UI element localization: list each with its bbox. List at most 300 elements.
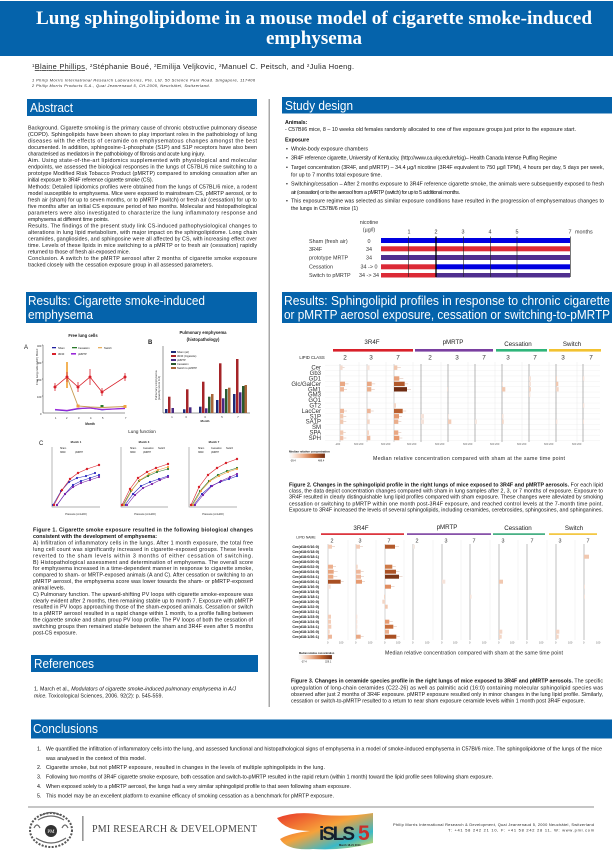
- chart: exposure timeline: 3R4F: [309, 247, 323, 253]
- chart: figure 2 lipid class profile: GT2: [309, 404, 322, 410]
- text block: conclusions: When exposed solely to a pMRTP aerosol, the lungs had a very similar sphingolipid profile to that seen following sham exposure.: [46, 784, 351, 790]
- heading: results left: emphysema: [28, 308, 93, 322]
- chart: figure 2 lipid class profile: 7: [533, 354, 537, 362]
- chart: figure 3 ceramide species profile: Cer(d18:1/22:1): [292, 610, 320, 614]
- chart: figure 2 lipid class profile: 600 200: [572, 442, 582, 446]
- legend: figure 2 colour scale: 489.4: [318, 460, 325, 462]
- chart: exposure timeline: [309, 220, 593, 279]
- chart: figure 3 ceramide species profile: Cer(d18:1/18:0): [292, 590, 320, 594]
- logo: iSLS 5 conference: iSLS: [319, 824, 355, 845]
- chart A: free lung cells: 0: [40, 412, 42, 416]
- text block: abstract: diseases with the effects of ceramide on emphysematous changes amongst the best: [28, 139, 258, 145]
- text block: study design: •: [286, 198, 288, 204]
- affiliations: [31, 78, 256, 88]
- legend: figure 3 colour scale: [299, 652, 335, 664]
- text block: study design: Whole-body exposure chambers: [291, 147, 368, 153]
- chart: exposure timeline: months: [575, 230, 593, 236]
- text block: figure 3 caption: cessation or switch-to-pMRTP resulted to a return to near sham exposure ceramide levels within 1 month post 3R4F exposure.: [291, 699, 585, 705]
- text block: study design: •: [286, 181, 288, 187]
- chart: figure 3 ceramide species profile: 100: [339, 640, 344, 644]
- text block: study design: •: [286, 156, 288, 162]
- text block: abstract: endpoints, we assessed the biological responses in the lungs of C57BL/6 mice switching to a: [28, 165, 257, 171]
- text block: study design: •: [286, 147, 288, 153]
- text block: conclusions: [37, 746, 602, 800]
- text block: figure 1 caption: clearly evident after 2 months, then remaining stable up to month 7. Exposure with pMRTP: [33, 598, 253, 604]
- plot: month 7: Cessation: [211, 447, 222, 450]
- chart: figure 3 ceramide species profile: Cer(d18:0/18:1): [292, 555, 320, 559]
- chart A: free lung cells: Switch: [104, 346, 112, 350]
- chart: exposure timeline: Switch to pMRTP: [309, 273, 351, 279]
- text block: figure 2 caption: cessation or switching to pMRTP within one month post-3R4F exposure, and reached control levels at the 7-month time point.: [289, 501, 603, 507]
- text block: abstract: Background. Cigarette smoking is the primary cause of chronic obstructive pulmonary disease: [28, 126, 257, 132]
- chart: exposure timeline: 34 -> 34: [359, 273, 379, 279]
- chart A: free lung cells: 5: [102, 416, 104, 420]
- text block: figure 3 caption: upregulation of long-chain ceramides (C22-26) as well as palmitic acid (16:0) containing molecular sphingolipid species was: [291, 686, 603, 692]
- chart: figure 3 ceramide species profile: 100: [368, 640, 373, 644]
- chart: figure 3 ceramide species profile: 0: [327, 640, 329, 644]
- chart: figure 3 ceramide species profile: Cer(d18:1/23:0): [292, 615, 320, 619]
- text block: abstract: Methods: Detailed lipidomics profiles were obtained from the lungs of C57BL/6 mice, a rodent: [28, 184, 258, 190]
- text block: figure 1 caption: to a pMRTP aerosol resulted in a rapid change within 1 month, to a profile falling between: [33, 611, 253, 617]
- chart: figure 2 lipid class profile: 3: [561, 354, 565, 362]
- chart: exposure timeline: nicotine: [360, 220, 378, 226]
- chart C: lung function PV loops: C: [39, 441, 44, 447]
- chart B: pulmonary emphysema bars: pMRTP: [177, 358, 186, 362]
- chart: figure 3 ceramide species profile: Cer(d18:1/26:1): [292, 635, 320, 639]
- 3R4F month 7 bars: [382, 545, 399, 639]
- text block: study design: This exposure regime was selected as similar exposure conditions have resulted in the progression of emphysematous changes to: [291, 198, 604, 204]
- legend: figure 3 colour scale: 329.1: [325, 660, 332, 664]
- chart: exposure timeline: Cessation: [309, 265, 333, 271]
- legend: figure 3 colour scale: -37.4: [301, 660, 307, 664]
- chart: figure 3 ceramide species profile: 3R4F: [353, 525, 369, 532]
- contact details: T: +41 58 242 21 10, F: +41 58 242 28 11, W: www.pmi.com: [448, 828, 594, 832]
- text block: figure 2 caption: class, the data depict concentration changes compared with sham in lung samples after 2, 3, or 7 months of exposure. Exposure to: [289, 488, 603, 494]
- chart: exposure timeline: Sham (fresh air): [309, 239, 348, 245]
- chart A: free lung cells: Free lung cells (x10³) BALF: [35, 348, 39, 385]
- chart: figure 3 ceramide species profile: 3: [444, 538, 448, 544]
- heading: results right: Results: Sphingolipid profiles in response to chronic cigarette: [284, 294, 610, 308]
- text block: abstract: model susceptible to emphysema. Mice were exposed to mainstream CS, pMRTP aerosol, or to: [28, 191, 257, 197]
- title banner: emphysema: [266, 28, 363, 49]
- chart: exposure timeline: 0: [368, 239, 370, 245]
- chart: figure 3 ceramide species profile: 0: [384, 640, 386, 644]
- text block: study design: [285, 120, 604, 212]
- chart B: pulmonary emphysema bars: 7: [237, 415, 239, 419]
- text block: abstract: characterised as mediators in the pathobiology of fibrosis and acute lung injury.: [28, 152, 205, 158]
- chart: figure 3 ceramide species profile: [292, 524, 601, 644]
- chart B: pulmonary emphysema bars: 3R4F (Cigarette): [177, 354, 196, 358]
- text block: conclusions: 1.: [37, 746, 41, 752]
- chart: figure 3 ceramide species profile: 3: [558, 538, 562, 544]
- plot: month 3: 3R4F: [130, 451, 136, 454]
- chart: figure 3 ceramide species profile: 0: [526, 640, 528, 644]
- contact details: [393, 822, 594, 832]
- heading: abstract: [27, 99, 257, 116]
- chart: figure 2 lipid class profile: Cessation: [504, 341, 532, 348]
- authors: Stéphanie Boué,: [93, 62, 154, 71]
- text block: figure 1 caption: A) Infiltration of inflammatory cells in the lungs. After 1 month exposure, the total free: [33, 540, 253, 546]
- text block: study design: the lungs in C57Bl/6 mice (1): [291, 206, 358, 212]
- text block: abstract: parameters were also investigated to characterize the lung inflammatory response and: [28, 210, 257, 216]
- text block: abstract: alterations in lung lipid metabolism, with major impact on the sphingolipidome. Long chain: [28, 230, 257, 236]
- chart: figure 3 ceramide species profile: Cer(d18:0/16:0): [292, 545, 320, 549]
- heading: references: References: [34, 656, 94, 671]
- chart caption: figure 2: Median relative concentration compared with sham at the same time point: [373, 456, 566, 462]
- title banner: Lung sphingolipidome in a mouse model of cigarette smoke-induced: [36, 8, 592, 29]
- affiliations: 1 Philip Morris International Research Laboratories, Pte. Ltd. 50 Science Park Road. Singapore, 117406: [32, 78, 256, 82]
- text block: figure 3 caption: observed after just 2 months of 3R4F exposure. pMRTP exposure resulted only in minor changes in the lung lipid profile. Similarly,: [291, 692, 603, 698]
- chart A: free lung cells: pMRTP: [78, 352, 87, 356]
- chart: figure 2 lipid class profile: 600 200: [544, 442, 554, 446]
- chart C: lung function PV loops: Lung function: [128, 429, 156, 434]
- logo: PMI crest: PM: [47, 830, 55, 835]
- plot: month 1: 3R4F: [60, 451, 66, 454]
- chart: figure 3 ceramide species profile: 0: [498, 640, 500, 644]
- text block: conclusions: 5.: [37, 794, 41, 800]
- text block: figure 1 caption: consistent with the development of emphysema:: [33, 534, 157, 540]
- text block: references: [34, 686, 236, 700]
- affiliations: 2 Philip Morris Products S.A., Quai Jeanrenaud 5, CH-2000, Neuchâtel, Switzerland.: [31, 83, 210, 88]
- text block: study design: for up to 7 months total exposure time.: [291, 173, 382, 179]
- authors: Emilija Veljkovic,: [157, 62, 219, 71]
- chart: exposure timeline: prototype MRTP: [309, 256, 349, 262]
- chart: figure 2 lipid class profile: Switch: [563, 341, 582, 348]
- logo text: PMI research and development: PMI RESEARCH & DEVELOPMENT: [92, 824, 257, 835]
- authors: 2: [219, 63, 222, 68]
- text block: abstract: fresh air (sham) for up to seven months, or to pMRTP (switch) or fresh air (cessation) for up to: [28, 197, 257, 203]
- text block: figure 1 caption: switching groups then remained stable between the sham and 3R4F even after 5 months: [33, 624, 253, 630]
- chart: figure 3 ceramide species profile: 0: [469, 640, 471, 644]
- chart A: free lung cells: 2: [66, 416, 68, 420]
- plot: month 1: Sham: [60, 447, 66, 450]
- chart: figure 3 ceramide species profile: 2: [416, 538, 418, 544]
- text block: figure 3 caption: Figure 3. Changes in ceramide species profile in the right lungs of mice exposed to 3R4F and pMRTP aerosols. The specific: [291, 678, 603, 684]
- chart: exposure timeline: 3: [462, 230, 464, 236]
- chart: figure 2 lipid class profile: LacCer: [302, 409, 321, 415]
- chart A: free lung cells: 300: [37, 361, 42, 365]
- chart: figure 3 ceramide species profile: LIPID NAME: [296, 536, 316, 540]
- plot: month 3: [121, 440, 168, 507]
- chart C: lung function PV loops: [39, 429, 237, 516]
- chart: figure 2 lipid class profile: 7: [589, 354, 593, 362]
- chart: figure 2 lipid class profile: 600 200: [435, 442, 445, 446]
- text block: abstract: ceramides, gangliosides, and sphingosine were all affected by CS, with increasing effect over: [28, 236, 257, 242]
- text block: figure 1 caption: [33, 528, 254, 636]
- legend: figure 2 colour scale: [289, 450, 330, 462]
- text block: figure 1 caption: C) Pulmonary function. The upward-shifting PV loops with cigarette smoke-exposure was: [33, 592, 253, 598]
- text block: conclusions: Cigarette smoke, but not pMRTP exposure, resulted in changes in the levels of multiple sphingolipids in the lung.: [46, 765, 325, 771]
- chart: figure 3 ceramide species profile: 100: [539, 640, 544, 644]
- chart: figure 2 lipid class profile: 2: [343, 354, 347, 362]
- chart A: free lung cells: 100: [37, 395, 42, 399]
- chart B: pulmonary emphysema bars: Month: [200, 419, 210, 423]
- text block: study design: Switching/cessation – After 2 months exposure to 3R4F reference cigarette smoke, the animals were subsequently exposed to fresh: [291, 181, 604, 187]
- chart: figure 2 lipid class profile: GD1: [309, 376, 322, 382]
- plot: month 3: Sham: [130, 447, 136, 450]
- chart B: pulmonary emphysema bars: (histopathology): [187, 337, 220, 342]
- text block: study design: Target concentration (3R4F, and pMRTP) – 34.4 µg/l nicotine (3R4F equivalent to 750 µg/l TPM), 4 hours per day, 5 days per week,: [291, 165, 604, 171]
- chart: figure 3 ceramide species profile: 0: [555, 640, 557, 644]
- heading: results left: Results: Cigarette smoke-induced: [28, 294, 205, 308]
- text block: figure 1 caption: pMRTP aerosol, the emphysema score was lower towards the sham- or pMRTP-exposed: [33, 579, 253, 585]
- chart: figure 3 ceramide species profile: 100: [596, 640, 601, 644]
- text block: abstract: time. Levels of these lipids in mice switching to a pMRTP or to fresh air (cessation) rapidly: [28, 243, 257, 249]
- chart A: free lung cells: Cessation: [78, 346, 90, 350]
- chart: figure 3 ceramide species profile: 2: [330, 538, 334, 544]
- 3R4F month 3 bars: [356, 545, 362, 639]
- chart: figure 2 lipid class profile: LIPID CLASS: [299, 355, 325, 360]
- text block: abstract: Aim. Using state-of-the-art lipidomics supplemented with physiological and molecular: [28, 158, 257, 164]
- text block: figure 2 caption: 3R4F resulted in clearly distinguishable lung lipid profiles compared with sham exposure. These changes were alleviated by smoking: [289, 494, 603, 500]
- chart: exposure timeline: 2: [434, 230, 438, 236]
- logo: iSLS 5 conference: 5: [358, 822, 370, 845]
- chart: figure 3 ceramide species profile: 0: [355, 640, 357, 644]
- plot: month 3: Month 3: [139, 440, 150, 444]
- chart: figure 2 lipid class profile: 3: [506, 354, 510, 362]
- chart: figure 3 ceramide species profile: 100: [568, 640, 573, 644]
- plot: month 7: pMRTP: [211, 451, 219, 454]
- text block: abstract: returned to those of fresh air-exposed mice.: [28, 250, 130, 256]
- chart B: pulmonary emphysema bars: 1: [171, 415, 173, 419]
- chart B: pulmonary emphysema bars: Pulmonary emphysema: [179, 330, 227, 335]
- heading: study design: Study design: [285, 98, 353, 113]
- chart A: free lung cells: 200: [37, 378, 42, 382]
- chart C: lung function PV loops: Pressure (cmH2O): [65, 512, 87, 516]
- chart: exposure timeline: 4: [488, 230, 492, 236]
- 3R4F month 2 bars: [340, 366, 345, 440]
- chart: figure 3 ceramide species profile: Cer(d18:0/24:0): [292, 570, 320, 574]
- chart A: free lung cells: 3: [78, 416, 80, 420]
- text block: figure 3 caption: [291, 678, 603, 705]
- chart A: free lung cells: [24, 333, 127, 426]
- chart: figure 3 ceramide species profile: Cer(d18:1/20:0): [292, 600, 320, 604]
- authors: 1: [32, 63, 35, 68]
- text block: conclusions: 3.: [37, 774, 41, 780]
- chart A: free lung cells: 7: [125, 416, 127, 420]
- text block: references: mice. Toxicological Sciences, 2006. 92(2): p. 545-559.: [34, 694, 163, 700]
- chart: figure 3 ceramide species profile: Cer(d18:1/24:0): [292, 620, 320, 624]
- heading: references: [31, 655, 258, 672]
- text block: study design: air (cessation) or to the aerosol from a pMRTP (switch) for up to 5 additional months.: [291, 190, 460, 196]
- chart: figure 2 lipid class profile: pMRTP: [443, 339, 463, 346]
- pMRTP and recovery bars: [413, 545, 589, 639]
- chart: figure 2 lipid class profile: 2: [428, 354, 432, 362]
- logo: iSLS 5 conference: March 18-21 2014: [339, 843, 361, 847]
- chart: figure 3 ceramide species profile: Cer(d18:0/24:1): [292, 575, 320, 579]
- text block: figure 1 caption: for emphysema increased in a time-dependent manner in response to cigarette smoke,: [33, 566, 253, 572]
- chart: exposure timeline: 34: [366, 247, 372, 253]
- chart: exposure timeline: 5: [516, 230, 518, 236]
- authors: Manuel C. Peitsch, and: [222, 62, 307, 71]
- authors: ,: [85, 62, 87, 71]
- chart: figure 3 ceramide species profile: 7: [586, 538, 590, 544]
- text block: figure 2 caption: Exposure to 3R4F increased the levels of several sphingolipids, including ceramides, cerebrosides, sphingosines, and sphinganines.: [289, 507, 603, 513]
- chart: figure 2 lipid class profile: 3R4F: [364, 339, 380, 346]
- chart B: pulmonary emphysema bars: 5: [221, 415, 223, 419]
- text block: abstract: prototype Modified Risk Tobacco Product (pMRTP) compared to smoking cessation after an: [28, 171, 257, 177]
- authors: Blaine Phillips: [35, 62, 85, 71]
- plot: month 7: Switch: [226, 447, 234, 450]
- heading: conclusions: Conclusions: [33, 721, 98, 736]
- text block: abstract: Conclusion. A switch to the pMRTP aerosol after 2 months of cigarette smoke exposure: [28, 256, 257, 262]
- chart: figure 3 ceramide species profile: 100: [510, 640, 515, 644]
- plot: month 1: [52, 440, 100, 507]
- text block: abstract: tracked closely with the cessation exposure group in all assessed parameters.: [28, 263, 213, 269]
- text block: abstract: initial exposure to 3R4F reference cigarette smoke (CS).: [28, 178, 153, 184]
- chart: exposure timeline: 34: [366, 256, 372, 262]
- chart: figure 2 lipid class profile: 600 200: [490, 442, 500, 446]
- plot: month 7: 3R4F: [198, 451, 204, 454]
- heading: results left: [26, 292, 257, 323]
- chart: figure 2 lipid class profile: GM3: [308, 393, 322, 399]
- chart: figure 2 lipid class profile: 600 200: [354, 442, 364, 446]
- plot: month 1: Month 1: [71, 440, 82, 444]
- chart A: free lung cells: 4: [90, 416, 92, 420]
- chart: figure 2 lipid class profile: 600 200: [381, 442, 391, 446]
- plot: month 3: Cessation: [143, 447, 154, 450]
- contact details: Philip Morris International Research & Development, Quai Jeanrenaud 5, 2000 Neuchâtel, Switzerland: [393, 822, 594, 827]
- chart A: free lung cells: 1: [55, 416, 57, 420]
- text block: conclusions: Following two months of 3R4F cigarette smoke exposure, both cessation and switch-to-pMRTP resulted in the rapid return (within 1 month) toward the lipid profile seen following sham exposure.: [46, 774, 493, 780]
- chart: figure 2 lipid class profile: Gb3: [310, 371, 322, 377]
- text block: conclusions: We quantified the infiltration of inflammatory cells into the lung, and assessed functional and histopathological signs of emphysema in a model of smoke-induced emphysema in C57Bl/6 mice. The sphingolipidome of the lungs of the mice: [46, 746, 602, 752]
- chart: figure 3 ceramide species profile: Cer(d18:0/26:1): [292, 580, 320, 584]
- logo: iSLS 5 conference: [277, 813, 373, 849]
- text block: study design: •: [286, 165, 288, 171]
- text block: figure 1 caption: lung cell count was significantly increased in cigarette-exposed groups. These levels: [33, 547, 253, 553]
- text block: abstract: (COPD). Sphingolipids have been shown to play important roles in the pathobiology of lung: [28, 132, 257, 138]
- chart: figure 3 ceramide species profile: Cer(d18:1/24:1): [292, 625, 320, 629]
- chart: figure 3 ceramide species profile: 0: [441, 640, 443, 644]
- chart: figure 2 lipid class profile: GQ1: [308, 398, 322, 404]
- chart: figure 2 lipid class profile: 600 200: [517, 442, 527, 446]
- chart: figure 3 ceramide species profile: pMRTP: [437, 524, 457, 531]
- text block: conclusions: was analysed in the context of this model.: [46, 756, 146, 762]
- chart: figure 2 lipid class profile: 7: [396, 354, 400, 362]
- chart: exposure timeline: 1: [408, 230, 410, 236]
- text block: figure 1 caption: post-CS exposure.: [33, 630, 77, 636]
- chart: exposure timeline: 7: [568, 230, 572, 236]
- chart B: pulmonary emphysema bars: Pulmonary emphysema: [154, 370, 158, 400]
- plot: month 7: Sham: [198, 447, 204, 450]
- plot: month 7: Month 7: [209, 440, 220, 444]
- chart C: lung function PV loops: Pressure (cmH2O): [134, 512, 156, 516]
- chart: figure 3 ceramide species profile: 7: [472, 538, 476, 544]
- chart A: free lung cells: 400: [37, 344, 42, 348]
- 3R4F month 2 bars: [328, 545, 341, 639]
- heading: study design: [282, 97, 612, 114]
- chart: figure 2 lipid class profile: SM: [312, 425, 321, 431]
- text block: figure 1 caption: Figure 1. Cigarette smoke exposure resulted in the following biological changes: [33, 528, 253, 534]
- chart: figure 2 lipid class profile: S1P: [310, 414, 321, 420]
- text block: abstract: documented. In addition, sphingosine-1-phosphate (S1P) and S1P receptors have also been: [28, 145, 257, 151]
- chart: figure 3 ceramide species profile: 3: [358, 538, 362, 544]
- chart: figure 3 ceramide species profile: Cessation: [504, 525, 532, 532]
- legend: figure 2 colour scale: Median relative concentration: [289, 450, 330, 454]
- chart: figure 2 lipid class profile: SA1P: [306, 420, 321, 426]
- chart B: pulmonary emphysema bars: 3: [204, 415, 206, 419]
- chart: figure 2 lipid class profile: 7: [482, 354, 486, 362]
- chart A: free lung cells: Month: [85, 422, 95, 426]
- text block: study design: Animals:: [285, 120, 308, 126]
- chart B: pulmonary emphysema bars: Cessation: [177, 362, 189, 366]
- text block: abstract: [28, 126, 258, 269]
- chart: figure 2 lipid class profile: Cer: [311, 366, 321, 372]
- chart: figure 3 ceramide species profile: 3: [502, 538, 504, 544]
- chart: figure 3 ceramide species profile: Switch: [565, 525, 584, 532]
- chart: figure 3 ceramide species profile: Cer(d18:1/16:0): [292, 585, 320, 589]
- text block: figure 2 caption: Figure 2. Changes in the sphingolipid profile in the right lungs of mice exposed to 3R4F and pMRTP aerosols. For each lipid: [289, 483, 603, 489]
- chart: figure 3 ceramide species profile: Cer(d18:1/18:1): [292, 595, 320, 599]
- chart B: pulmonary emphysema bars: 3: [185, 415, 187, 419]
- plot: month 3: Switch: [158, 447, 166, 450]
- chart B: pulmonary emphysema bars: [148, 330, 250, 423]
- text block: references: 1. March et al., Modulators of cigarette smoke-induced pulmonary emphysema in A/J: [34, 686, 236, 692]
- text block: figure 1 caption: animal levels.: [33, 586, 65, 592]
- chart caption: figure 3: Median relative concentration compared with sham at the same time point: [385, 650, 564, 656]
- text block: abstract: five months after an initial CS exposure period of two months. Molecular and histopathological: [28, 204, 257, 210]
- chart A: free lung cells: 3R4F: [58, 352, 65, 356]
- chart: figure 2 lipid class profile: GM1: [308, 387, 322, 393]
- text block: figure 1 caption: reverted to the sham levels within 3 months of either cessation of switching.: [33, 553, 253, 559]
- text block: figure 1 caption: B) Histopathological assessment and determination of emphysema. The overall score: [33, 560, 253, 566]
- chart: figure 2 lipid class profile: 3: [369, 354, 373, 362]
- text block: figure 1 caption: resulted in PV loops approaching those of the sham-exposed animals. Cessation or switch: [33, 605, 253, 611]
- 3R4F month 3 bars: [367, 366, 372, 440]
- text block: figure 1 caption: compared to sham- or MRTP-exposed animals (A and C). After cessation or switching to an: [33, 573, 253, 579]
- chart B: pulmonary emphysema bars: (severity score 0-4): [157, 376, 161, 400]
- chart: figure 3 ceramide species profile: Cer(d18:1/26:0): [292, 630, 320, 634]
- chart A: free lung cells: Sham: [58, 346, 65, 350]
- authors: Julia Hoeng.: [310, 62, 354, 71]
- 3R4F month 7 bars: [394, 366, 407, 440]
- chart: exposure timeline: (µg/l): [363, 228, 375, 234]
- chart: figure 2 lipid class profile: 3: [455, 354, 459, 362]
- chart: figure 2 lipid class profile: Glc/GalCer: [291, 382, 321, 388]
- chart A: free lung cells: Free lung cells: [68, 333, 98, 338]
- text block: abstract: Results. The findings of the present study link CS-induced pathophysiological changes to: [28, 224, 257, 230]
- heading: conclusions: [31, 720, 612, 738]
- chart: figure 2 lipid class profile: SPA: [309, 431, 321, 437]
- text block: conclusions: 2.: [37, 765, 41, 771]
- chart: figure 3 ceramide species profile: 100: [425, 640, 430, 644]
- text block: figure 2 caption: [289, 483, 603, 513]
- chart A: free lung cells: A: [24, 345, 28, 351]
- text block: study design: Exposure: [285, 138, 309, 144]
- authors: [32, 62, 354, 71]
- plot: month 3: pMRTP: [143, 451, 151, 454]
- text block: figure 1 caption: the cigarette smoke and sham group PV loop profile. The PV loops of both the cessation of: [33, 618, 254, 624]
- chart: figure 3 ceramide species profile: 0: [412, 640, 414, 644]
- chart: figure 3 ceramide species profile: 100: [482, 640, 487, 644]
- chart: figure 2 lipid class profile: 600 200: [463, 442, 473, 446]
- chart: figure 3 ceramide species profile: Cer(d18:0/18:0): [292, 550, 320, 554]
- logo: PMI crest: [30, 812, 72, 847]
- text block: study design: 3R4F reference cigarette, University of Kentucky, (http://www.ca.uky.edu/refcig)– Health Canada Intense Puffing Regime: [291, 156, 557, 162]
- chart: figure 3 ceramide species profile: Cer(d18:0/20:0): [292, 560, 320, 564]
- chart: figure 2 lipid class profile: SPH: [309, 436, 321, 442]
- chart: figure 3 ceramide species profile: 7: [388, 538, 390, 544]
- chart: figure 2 lipid class profile: -200: [335, 442, 341, 446]
- text block: abstract: emphysema at different time points.: [28, 217, 109, 223]
- title banner: [0, 1, 613, 56]
- authors: 2: [154, 63, 157, 68]
- pMRTP and recovery bars: [421, 376, 584, 424]
- chart: exposure timeline: 34 -> 0: [361, 265, 377, 271]
- chart B: pulmonary emphysema bars: B: [148, 340, 153, 346]
- text block: conclusions: This model may be an excellent platform to examine efficacy of smoking cessation as a benchmark for pMRTP exposure.: [46, 794, 334, 800]
